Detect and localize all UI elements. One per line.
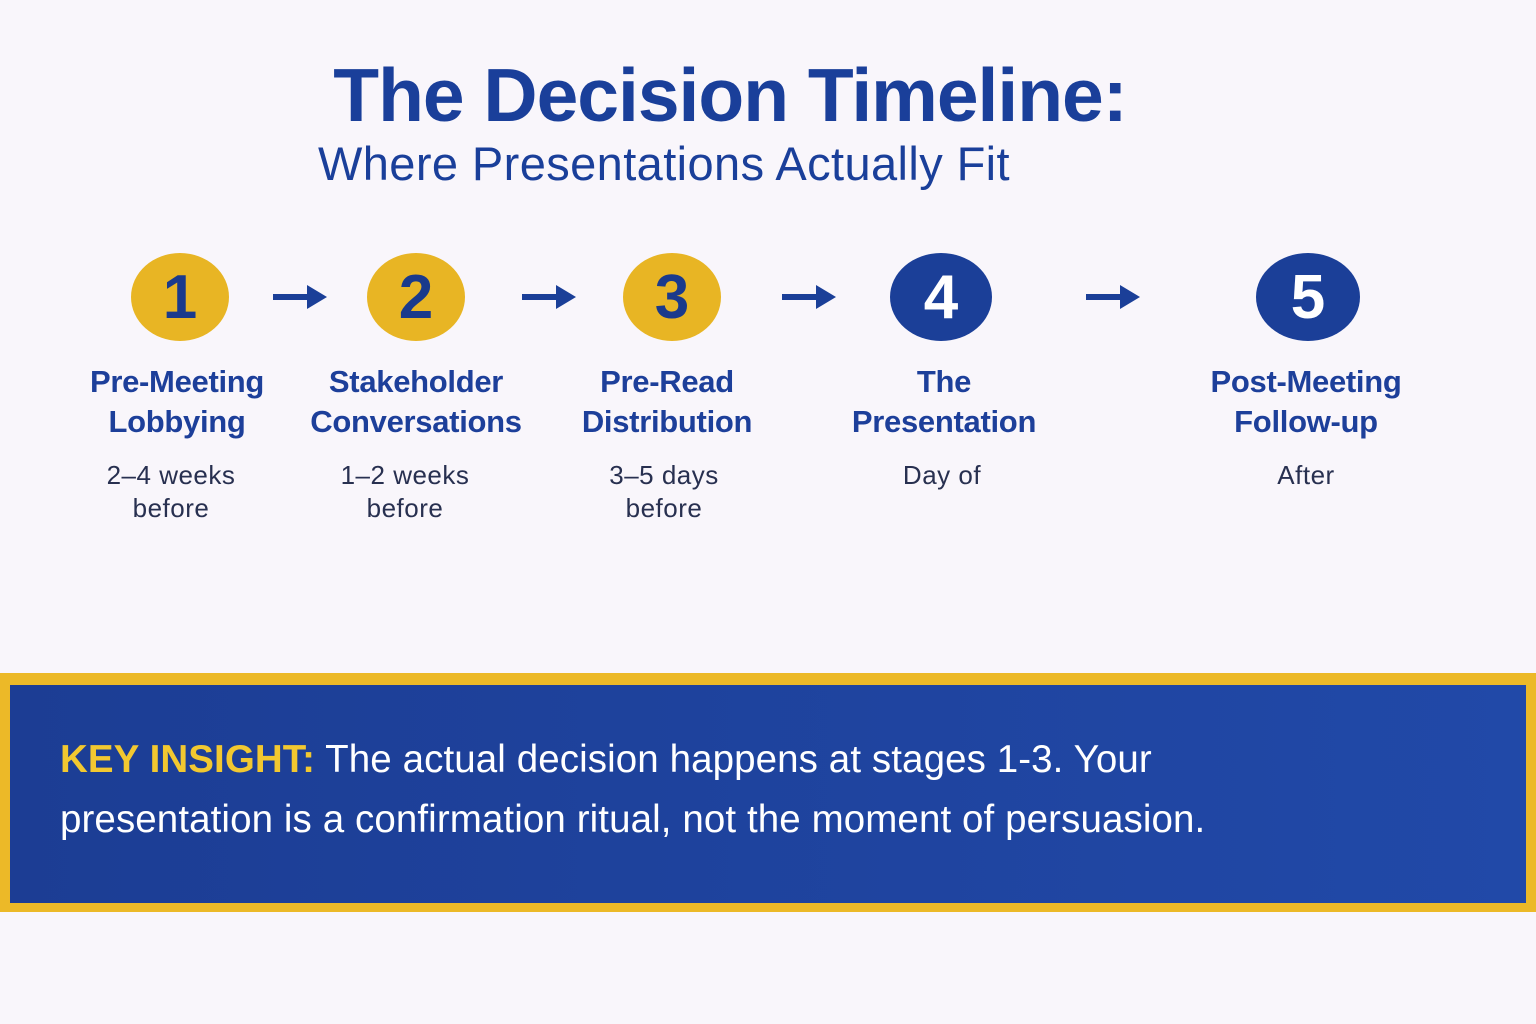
stage 2: Stakeholder: [329, 364, 503, 399]
stage 5: [1210, 253, 1402, 490]
stage 4: Day of: [903, 460, 981, 490]
stage 1: [90, 253, 264, 523]
stage 3: 3–5 days: [609, 460, 719, 490]
insight text: KEY INSIGHT: The actual decision happens at stages 1-3. Your: [60, 738, 1152, 781]
arrow 4: [1086, 285, 1140, 309]
stage 2: before: [367, 493, 443, 523]
subtitle: Where Presentations Actually Fit: [318, 137, 1010, 190]
stage 1: 1: [163, 262, 197, 332]
stage 2: 1–2 weeks: [341, 460, 469, 490]
stage 3: [582, 253, 752, 523]
stage 3: before: [626, 493, 702, 523]
stage 2: 2: [399, 262, 433, 332]
stage 4: The: [917, 364, 971, 399]
stage 1: Lobbying: [108, 404, 246, 439]
stage 5: After: [1277, 460, 1335, 490]
stage 3: Pre-Read: [600, 364, 734, 399]
stage 4: 4: [924, 262, 958, 332]
stage 3: 3: [655, 262, 689, 332]
stage 1: Pre-Meeting: [90, 364, 264, 399]
arrow 2: [522, 285, 576, 309]
arrow 3: [782, 285, 836, 309]
stage 2: Conversations: [310, 404, 522, 439]
timeline: [90, 253, 1402, 523]
insight text: presentation is a confirmation ritual, not the moment of persuasion.: [60, 798, 1205, 841]
title: The Decision Timeline:: [333, 53, 1127, 137]
insight text: [60, 738, 1205, 841]
stage 1: 2–4 weeks: [107, 460, 235, 490]
arrow 1: [273, 285, 327, 309]
stage 2: [310, 253, 522, 523]
stage 3: Distribution: [582, 404, 752, 439]
stage 5: 5: [1291, 262, 1325, 332]
stage 5: Follow-up: [1234, 404, 1378, 439]
stage 4: [852, 253, 1036, 490]
key insight banner: [0, 673, 1536, 912]
stage 1: before: [133, 493, 209, 523]
stage 4: Presentation: [852, 404, 1036, 439]
stage 5: Post-Meeting: [1210, 364, 1402, 399]
